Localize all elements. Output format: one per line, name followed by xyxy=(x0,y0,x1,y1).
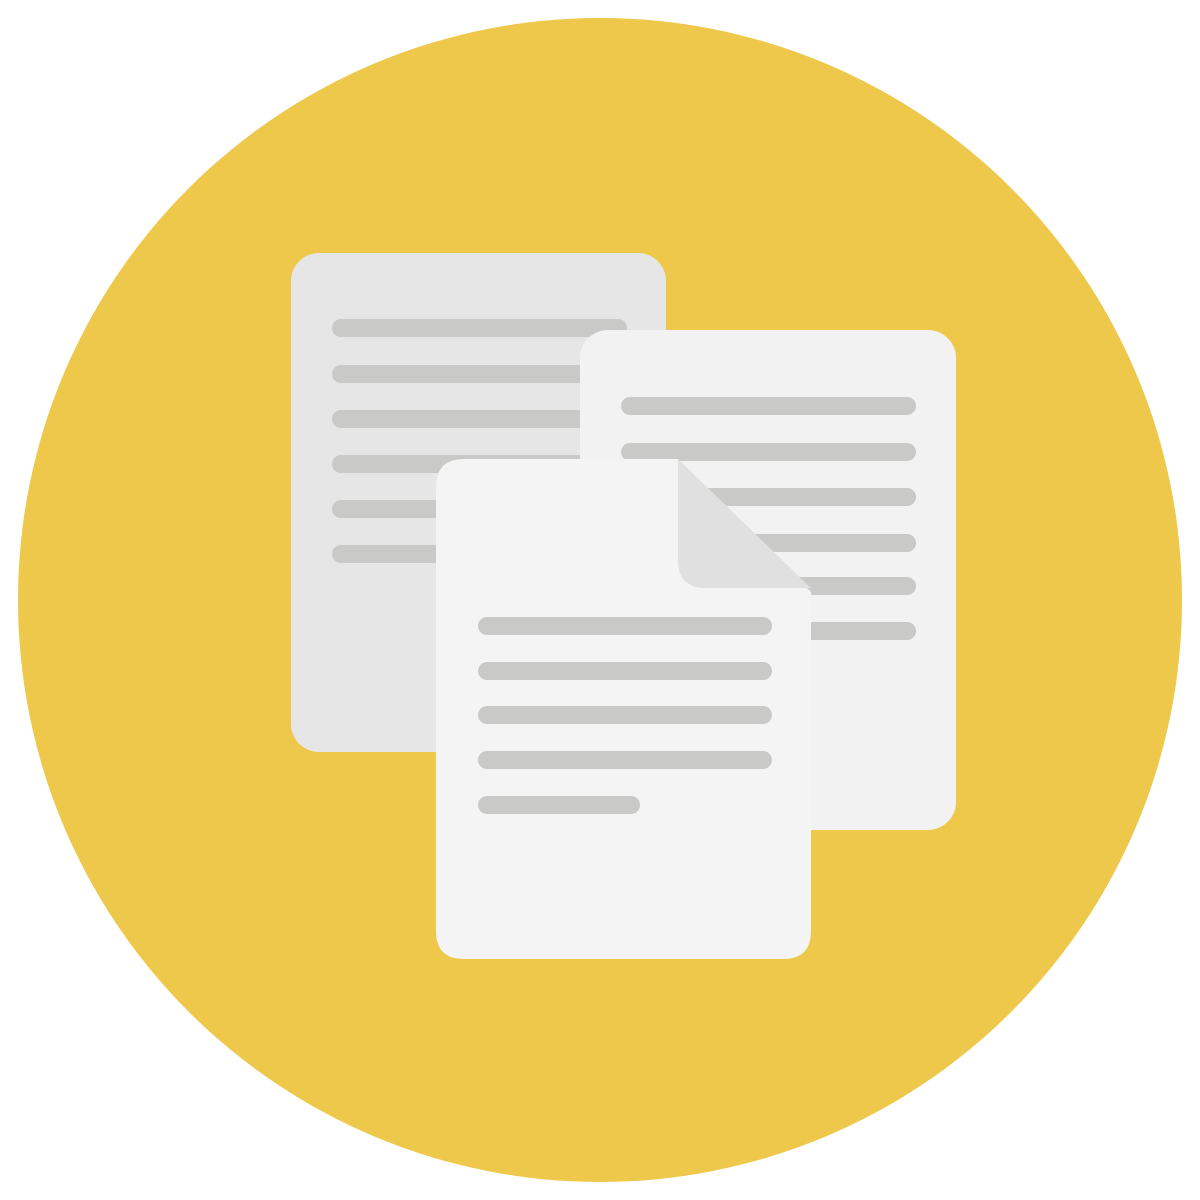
icon: middle document xyxy=(580,330,956,830)
icon: back document xyxy=(291,253,666,752)
icon: front document xyxy=(436,459,811,959)
folded corner xyxy=(678,459,811,588)
